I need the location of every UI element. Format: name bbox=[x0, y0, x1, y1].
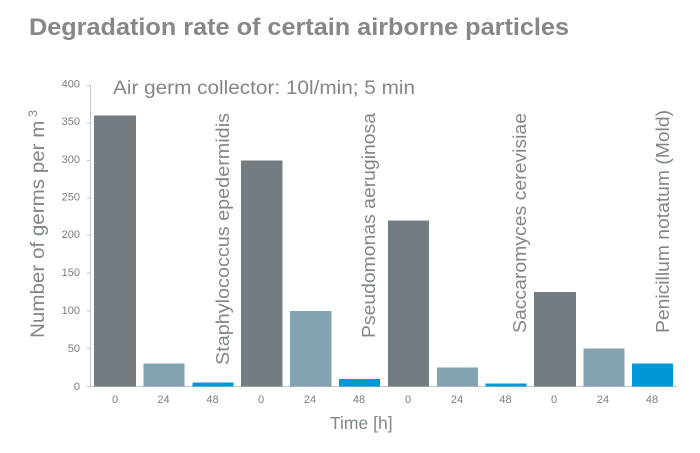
x axis tick labels: 24 bbox=[451, 394, 463, 406]
species label: Penicillum notatum (Mold): Penicillum notatum (Mold) bbox=[652, 110, 673, 333]
y axis tick labels: 0 bbox=[74, 381, 80, 393]
x axis tick labels: 48 bbox=[206, 394, 219, 406]
x axis tick labels: 0 bbox=[405, 394, 411, 406]
species label: Staphylococcus epedermidis: Staphylococcus epedermidis bbox=[212, 113, 233, 365]
title: Degradation rate of certain airborne particles bbox=[29, 14, 569, 41]
y axis tick labels: 150 bbox=[62, 267, 80, 279]
species label: Pseudomonas aeruginosa: Pseudomonas aeruginosa bbox=[358, 112, 379, 338]
x axis tick labels: 48 bbox=[499, 394, 512, 406]
x axis tick labels: 0 bbox=[258, 394, 264, 406]
x axis tick labels: 24 bbox=[597, 394, 609, 406]
x axis tick labels: 0 bbox=[112, 394, 118, 406]
y axis tick labels: 300 bbox=[62, 154, 80, 166]
y axis tick labels: 400 bbox=[62, 78, 80, 90]
x axis tick labels: 48 bbox=[646, 394, 658, 406]
y axis bbox=[87, 85, 677, 386]
y axis title: 3 bbox=[26, 110, 40, 121]
y axis title: Number of germs per m bbox=[27, 132, 49, 338]
y axis tick labels bbox=[62, 78, 80, 393]
bars: Pseudomonas aeruginosa bbox=[241, 160, 380, 386]
bars: Saccaromyces cerevisiae bbox=[388, 220, 526, 386]
x axis tick labels: 0 bbox=[551, 394, 557, 406]
y axis tick labels: 100 bbox=[62, 305, 80, 317]
y axis tick labels: 200 bbox=[62, 229, 80, 241]
y axis tick labels: 350 bbox=[62, 116, 80, 128]
x axis tick labels: 24 bbox=[157, 394, 170, 406]
x axis tick labels: 24 bbox=[304, 394, 316, 406]
y axis tick labels: 250 bbox=[62, 192, 80, 204]
x axis tick labels: 48 bbox=[353, 394, 365, 406]
bars: Penicillum notatum bbox=[534, 292, 673, 386]
x axis tick labels bbox=[112, 394, 658, 406]
subtitle: collector settings: Air germ collector: 10l/min; 5 min bbox=[113, 77, 415, 99]
y axis tick labels: 50 bbox=[68, 343, 80, 355]
species label: Saccaromyces cerevisiae: Saccaromyces cerevisiae bbox=[509, 113, 530, 333]
x axis title: Time [h] bbox=[330, 413, 393, 433]
bars: Staphylococcus epedermidis bbox=[94, 116, 234, 386]
